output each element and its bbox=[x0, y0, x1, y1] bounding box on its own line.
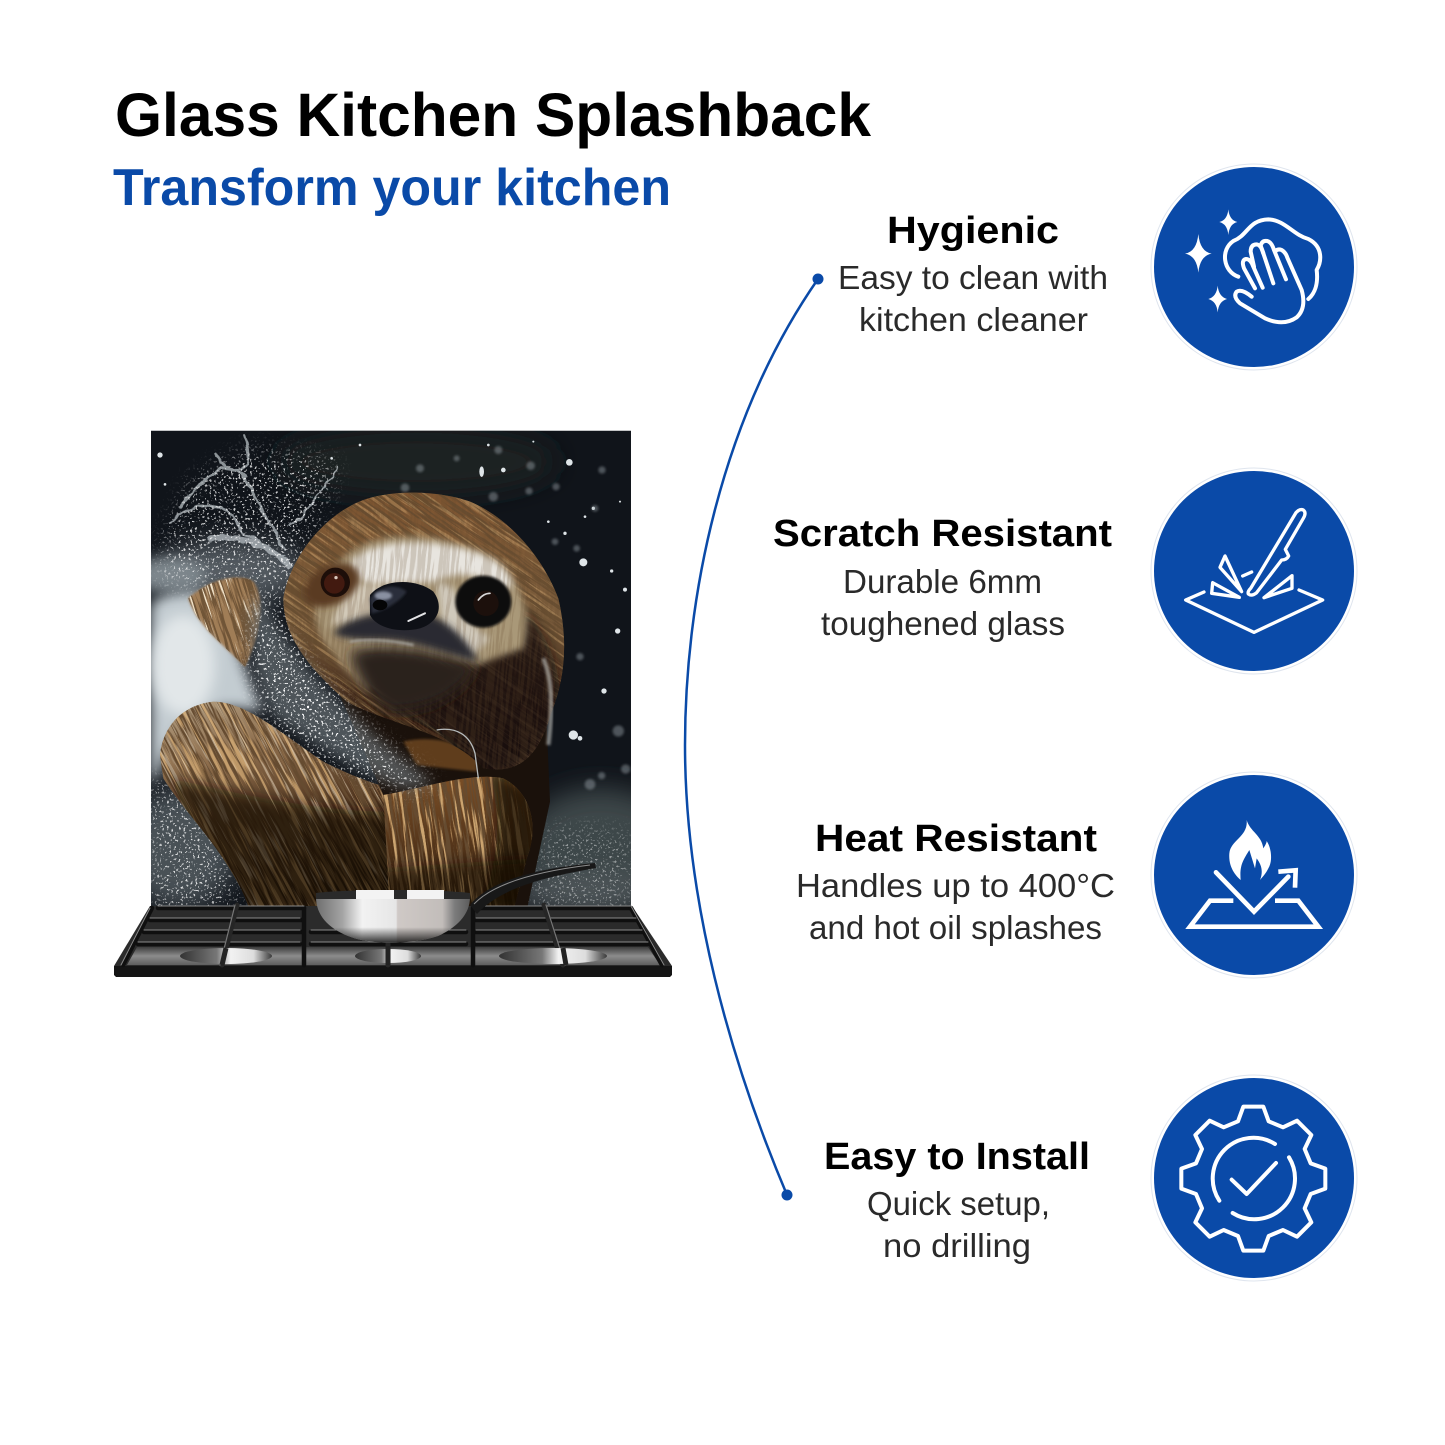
gas hob bbox=[114, 863, 672, 977]
fur texture on chest bbox=[384, 776, 532, 906]
feature text: Hygienic: kitchen cleaner bbox=[859, 301, 1088, 338]
feature text: Scratch Resistant: Durable 6mm bbox=[843, 563, 1042, 600]
frying pan bbox=[316, 863, 596, 943]
feature text: Scratch Resistant bbox=[773, 513, 1112, 642]
grate bars bbox=[121, 905, 664, 965]
feature text: Scratch Resistant: toughened glass bbox=[821, 605, 1065, 642]
lower arm fur mass bbox=[160, 702, 386, 906]
hob base bbox=[114, 906, 672, 966]
feature text: Scratch Resistant: Scratch Resistant bbox=[773, 513, 1112, 555]
muzzle bbox=[350, 647, 477, 712]
feature text: Easy to Install: Quick setup, bbox=[867, 1185, 1050, 1222]
chest bbox=[383, 777, 533, 911]
icon: hand wiping with sparkles bbox=[1151, 164, 1357, 370]
burners bbox=[180, 946, 607, 965]
face pale fur bbox=[315, 536, 527, 665]
icon: knife scratching glass bbox=[1151, 468, 1357, 674]
head bbox=[283, 493, 564, 769]
splashback panel: sloth in water splash bbox=[151, 430, 631, 906]
raised hand bbox=[188, 578, 260, 667]
fur texture on hand bbox=[188, 578, 260, 666]
spray speckle bbox=[151, 434, 376, 906]
feature text: Hygienic: Easy to clean with bbox=[838, 259, 1108, 296]
feature text: Hygienic: Hygienic bbox=[887, 210, 1059, 252]
fur texture on head bbox=[283, 492, 564, 770]
title: Glass Kitchen Splashback bbox=[115, 81, 871, 149]
subtitle: Transform your kitchen bbox=[113, 159, 671, 217]
icon: flame over heat resistant surface bbox=[1151, 772, 1357, 978]
feature text: Heat Resistant: Heat Resistant bbox=[815, 818, 1097, 860]
feature text: Easy to Install bbox=[824, 1136, 1090, 1264]
feature text: Heat Resistant: and hot oil splashes bbox=[809, 909, 1102, 946]
front bar bbox=[114, 966, 672, 977]
feature text: Easy to Install: no drilling bbox=[883, 1227, 1031, 1264]
water over the body bbox=[252, 592, 433, 788]
curved connector line bbox=[685, 274, 824, 1200]
product image: splashback with sloth and gas hob bbox=[114, 430, 672, 977]
eye left bbox=[302, 559, 364, 612]
fur texture on arm bbox=[160, 702, 388, 906]
feature text: Heat Resistant: Handles up to 400°C bbox=[796, 867, 1115, 904]
right side droplets bbox=[157, 441, 627, 741]
feature text: Hygienic bbox=[838, 210, 1108, 338]
fur texture on face bbox=[286, 493, 564, 770]
neck bbox=[340, 696, 550, 906]
steel plate bbox=[127, 947, 660, 965]
splash plume bbox=[170, 435, 337, 565]
icon: gear with check mark bbox=[1151, 1075, 1357, 1281]
water foam left bbox=[150, 590, 263, 785]
eye right bbox=[455, 576, 511, 628]
feature text: Heat Resistant bbox=[796, 818, 1115, 946]
feature text: Easy to Install: Easy to Install bbox=[824, 1136, 1090, 1178]
